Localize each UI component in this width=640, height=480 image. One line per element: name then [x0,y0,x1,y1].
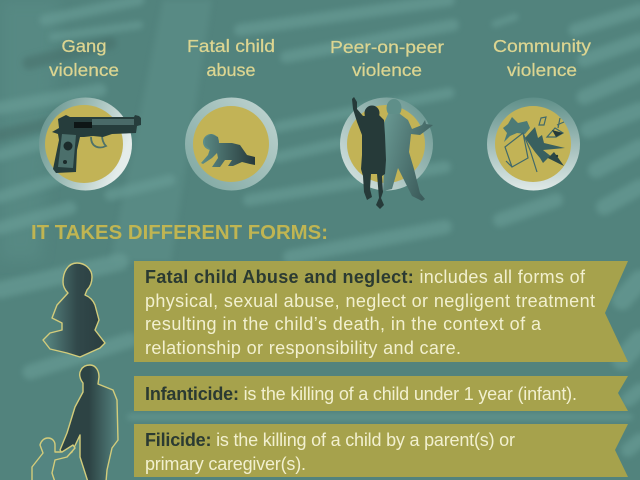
ribbon: filicide [134,424,628,477]
icon: shattered glass in circle [487,98,580,190]
icon: crawling baby in circle [185,98,278,190]
heading: Gang violence [49,36,119,80]
heading: Community violence [493,36,591,80]
silhouette: parent holding child's hand [32,365,118,480]
heading: Fatal child abuse: Fatal child [187,36,275,56]
heading: Gang violence: Gang [62,36,106,56]
heading: Peer-on-peer violence: violence [352,60,422,80]
heading: Community violence: violence [507,60,577,80]
heading: Peer-on-peer violence: Peer-on-peer [330,37,444,57]
ribbon: fatal child abuse and neglect [134,261,628,362]
ribbon: filicide: primary caregiver(s). [145,454,306,474]
heading: it takes different forms: IT TAKES DIFFERENT FORMS: [31,222,328,244]
heading: Gang violence: violence [49,60,119,80]
ribbon: fatal child abuse and neglect: resulting in the child’s death, in the context of a [145,314,542,334]
silhouette: seated child [43,263,105,357]
ribbon: infanticide: Infanticide: is the killing of a child under 1 year (infant). [145,384,577,404]
ribbon: fatal child abuse and neglect: physical, sexual abuse, neglect or negligent treatment [145,291,595,311]
ribbon: infanticide [134,376,628,411]
heading: Peer-on-peer violence [330,37,444,80]
icon: two peers silhouette in circle [340,97,433,209]
ribbon: fatal child abuse and neglect: relationship or responsibility and care. [145,338,461,358]
icon: pistol in circle [39,98,141,190]
ribbon: fatal child abuse and neglect: Fatal child Abuse and neglect: includes all forms of [145,267,586,287]
heading: Fatal child abuse [187,36,275,80]
heading: Community violence: Community [493,36,591,56]
heading: Fatal child abuse: abuse [206,60,256,80]
ribbon: filicide: Filicide: is the killing of a child by a parent(s) or [145,430,515,450]
